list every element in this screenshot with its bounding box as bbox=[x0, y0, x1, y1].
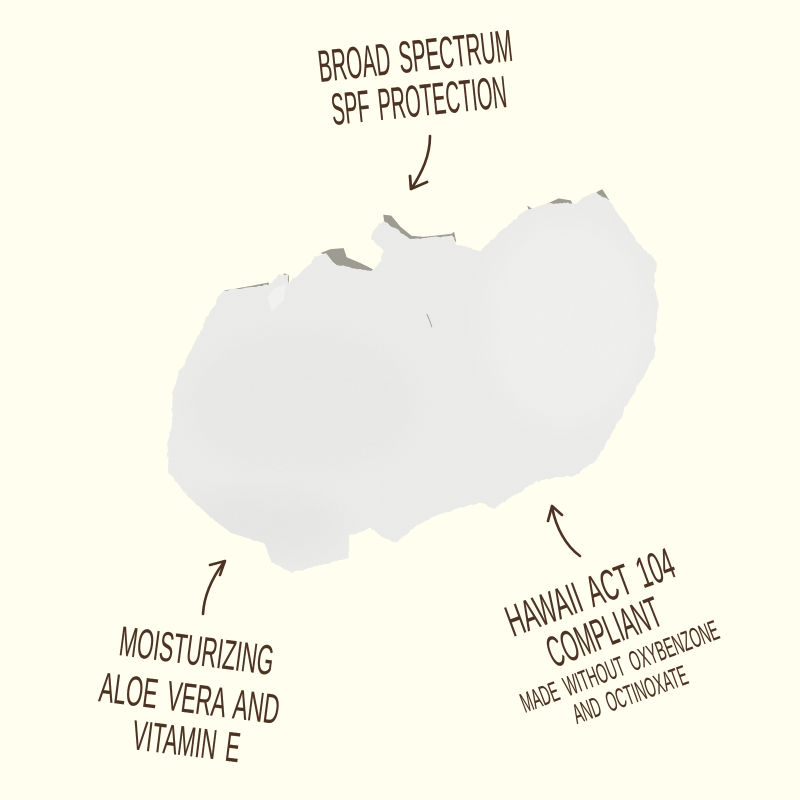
text: SPF PROTECTION bbox=[329, 66, 509, 135]
arrow: pointing up to swatch from right bbox=[548, 506, 580, 556]
callout: moisturizing aloe vera and vitamin E: VITAMIN E bbox=[130, 711, 243, 771]
swatch shading and texture bbox=[200, 204, 582, 616]
subtext: made without oxybenzone and octinoxate bbox=[516, 614, 723, 730]
swatch body bbox=[167, 192, 659, 573]
product swatch: sunscreen smear bbox=[167, 189, 658, 573]
callout: moisturizing aloe vera and vitamin E bbox=[97, 617, 282, 771]
heading: Hawaii Act 104 compliant bbox=[499, 539, 681, 677]
heading: Hawaii Act 104 compliant: COMPLIANT bbox=[540, 588, 668, 677]
arrow: pointing up to swatch from left bbox=[203, 561, 225, 614]
swatch shadows along top edge bbox=[223, 189, 609, 318]
arrow: pointing down to swatch bbox=[410, 136, 430, 189]
callout: Hawaii Act 104 compliant bbox=[499, 539, 723, 730]
callout: moisturizing aloe vera and vitamin E: MOISTURIZING bbox=[117, 617, 277, 684]
callout: broad spectrum SPF protection bbox=[316, 20, 515, 135]
callout: moisturizing aloe vera and vitamin E: ALOE VERA AND bbox=[97, 663, 282, 733]
